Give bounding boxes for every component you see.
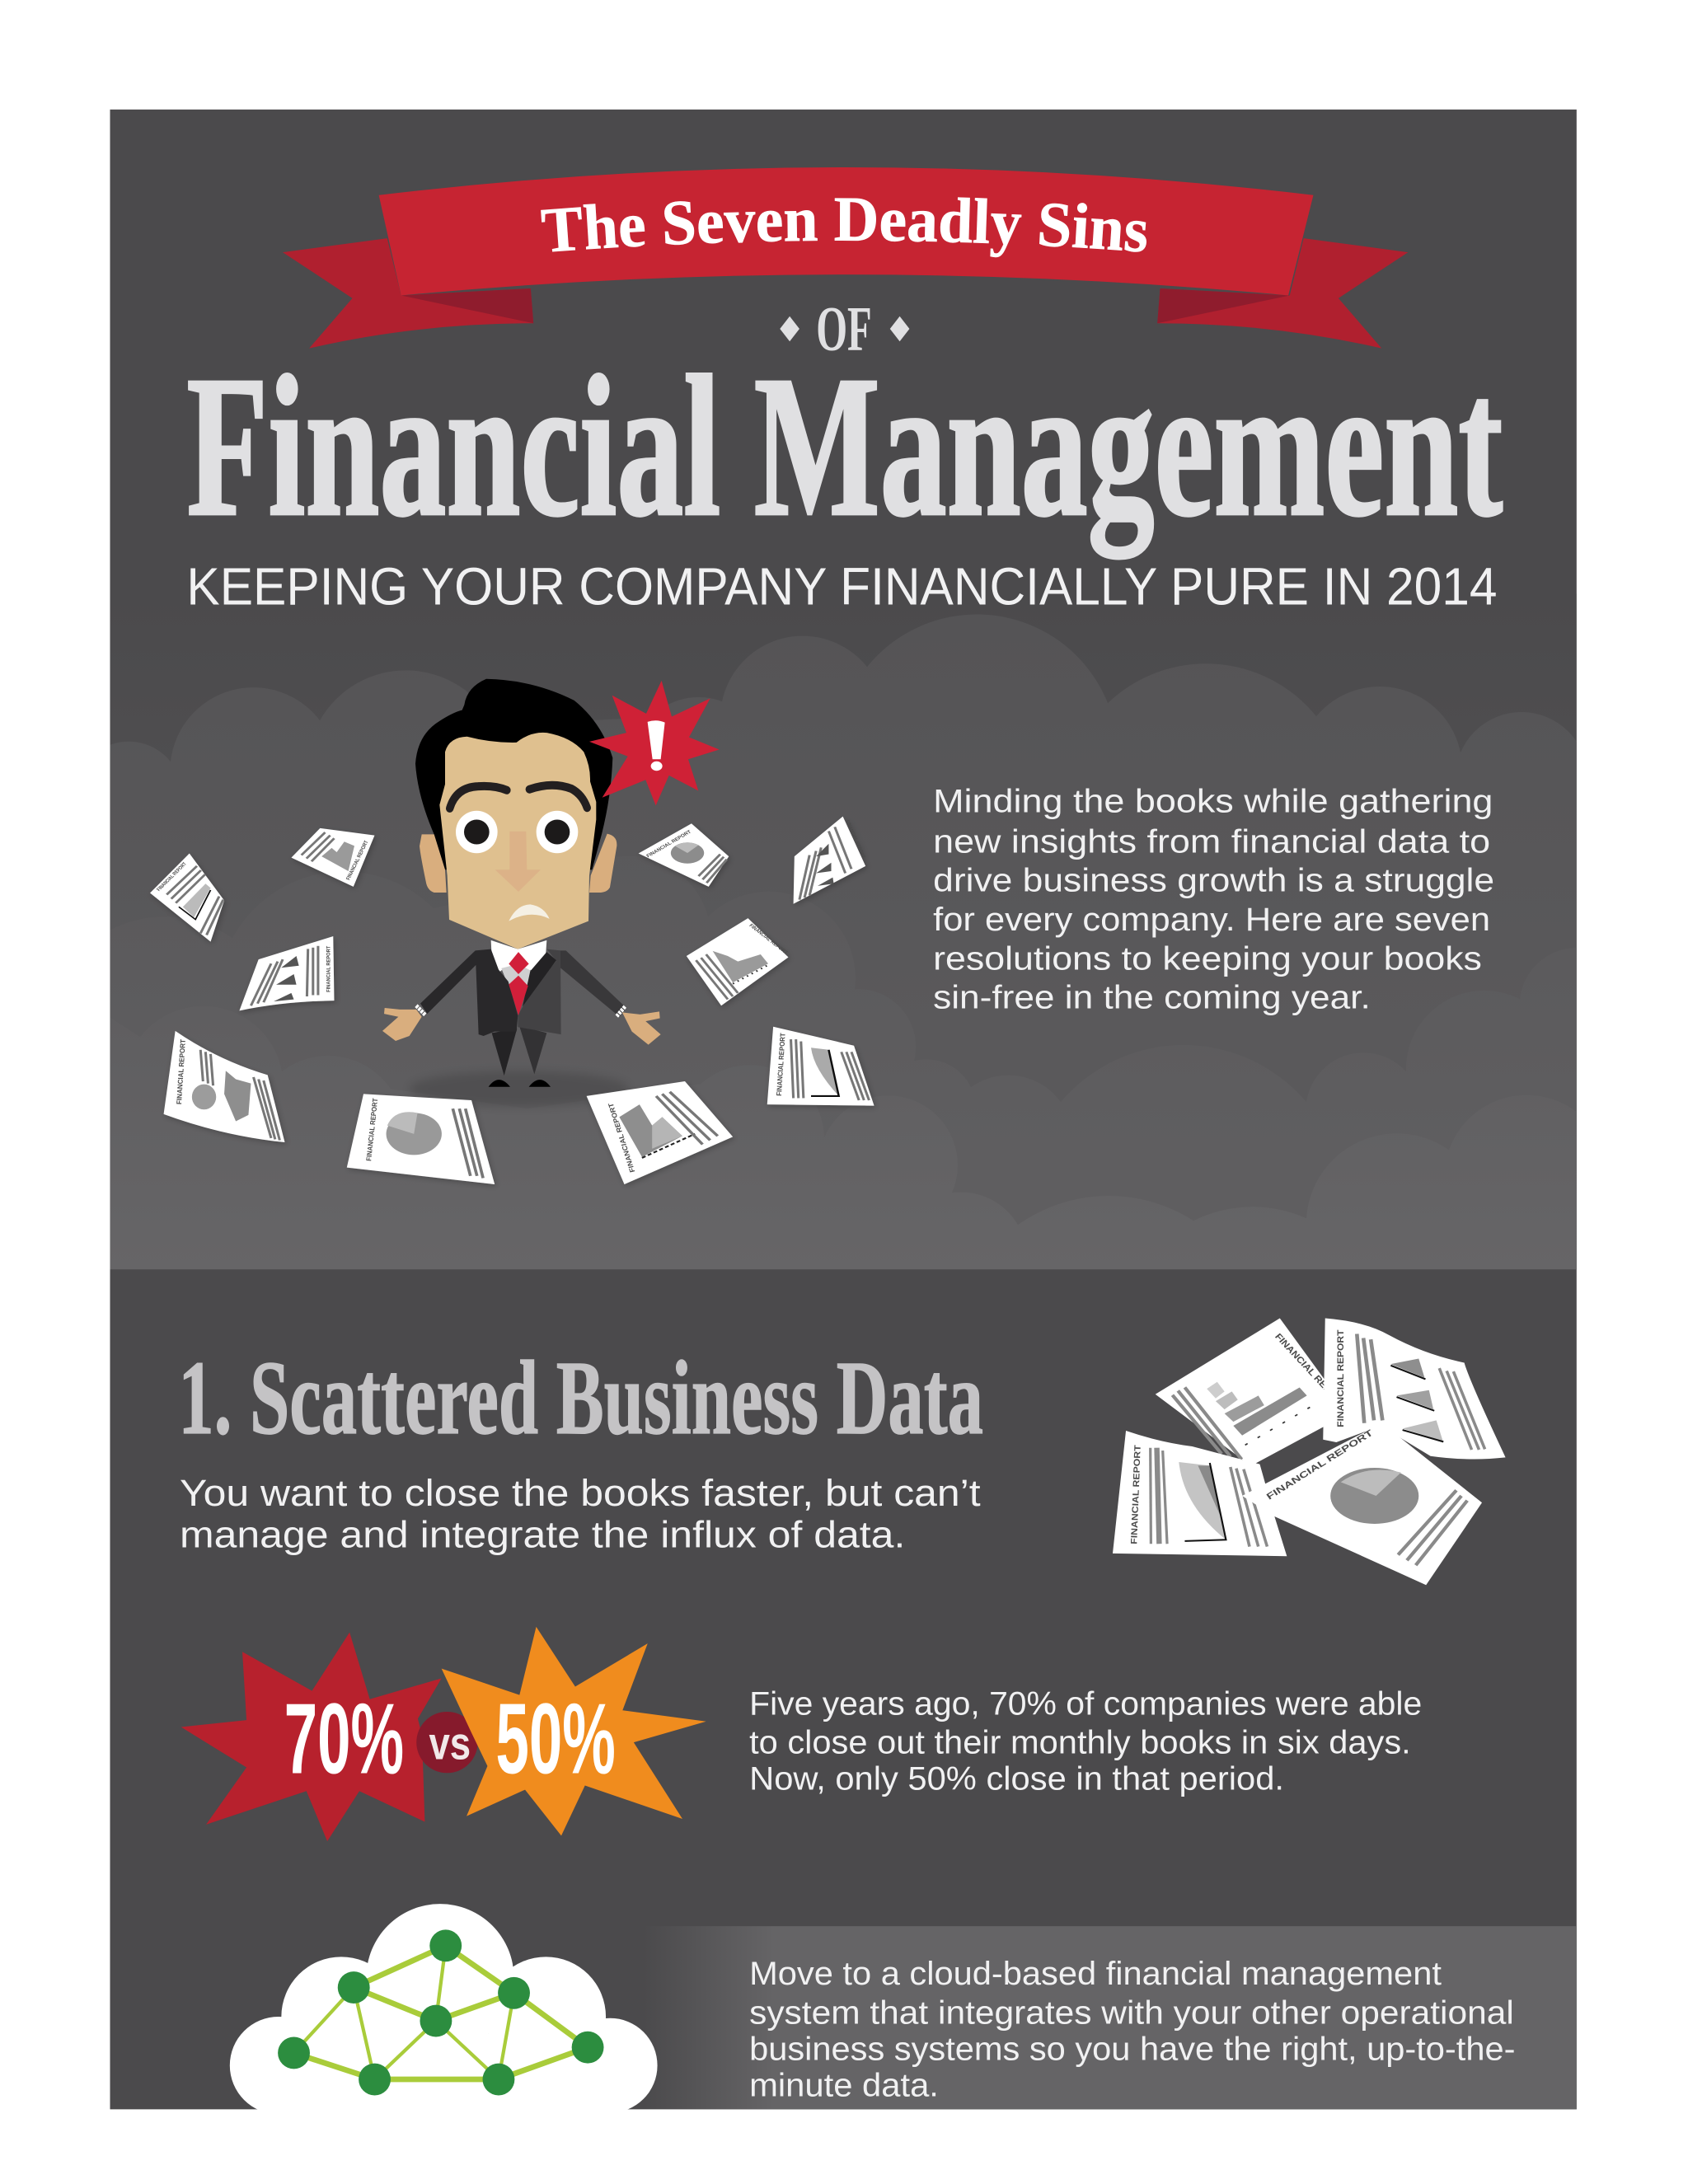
report: pie chart bbox=[1242, 1423, 1482, 1585]
stat: vs badge: vs bbox=[429, 1718, 471, 1769]
panel: solution band bbox=[644, 1926, 1577, 2109]
scattered report papers bbox=[150, 817, 874, 1184]
report paper: lower centre: FINANCIAL REPORT bbox=[365, 1098, 379, 1161]
tie bbox=[509, 952, 529, 1015]
eyes bbox=[456, 811, 578, 853]
report paper: top right bbox=[639, 823, 729, 887]
report: list charts bbox=[1323, 1319, 1506, 1459]
ground shadow bbox=[410, 1071, 629, 1107]
icon: stack of financial reports bbox=[1113, 1319, 1506, 1585]
panel: dark background bbox=[110, 110, 1577, 2109]
stat text: Now, only 50% close in that period. bbox=[749, 1761, 1284, 1797]
ribbon right tail bbox=[1157, 238, 1408, 349]
shoes bbox=[489, 1080, 551, 1087]
report: area chart bbox=[1113, 1431, 1287, 1556]
report paper: middle right: FINANCIAL REPORT bbox=[748, 923, 789, 956]
network lines bbox=[294, 1946, 588, 2079]
cloud layer back bbox=[110, 615, 1577, 903]
solution text: business systems so you have the right, up-to-the- bbox=[749, 2031, 1515, 2067]
stat: orange burst 50% bbox=[442, 1627, 706, 1835]
jacket right bbox=[518, 949, 561, 1034]
arms bbox=[420, 950, 626, 1017]
section heading: 1. Scattered Business Data bbox=[178, 1339, 983, 1456]
intro text: for every company. Here are seven bbox=[933, 902, 1490, 938]
section text: You want to close the books faster, but can’t bbox=[180, 1472, 981, 1514]
icon: red alarm burst bbox=[589, 681, 720, 805]
right hand bbox=[622, 1011, 661, 1045]
hero backdrop bbox=[1576, 593, 1577, 948]
report paper: top left bbox=[291, 828, 374, 887]
eyebrows bbox=[450, 785, 587, 808]
report paper: far left: FINANCIAL REPORT bbox=[156, 861, 188, 893]
hair bbox=[415, 679, 612, 869]
icon: exclamation mark bbox=[648, 720, 665, 771]
intro text bbox=[933, 783, 1494, 1016]
stat: orange burst 50%: 50% bbox=[496, 1682, 616, 1794]
solution text: system that integrates with your other operational bbox=[749, 1994, 1514, 2031]
legs bbox=[492, 1025, 546, 1076]
report: bar chart: FINANCIAL REPORT bbox=[1273, 1332, 1348, 1411]
report: pie chart: FINANCIAL REPORT bbox=[1265, 1428, 1376, 1502]
report: area chart: FINANCIAL REPORT bbox=[1130, 1444, 1143, 1544]
cloud shape bbox=[230, 1904, 658, 2117]
report paper: far right bbox=[794, 817, 865, 904]
intro text: drive business growth is a struggle bbox=[933, 863, 1494, 899]
report paper: lower right: FINANCIAL REPORT bbox=[775, 1033, 787, 1096]
left hand bbox=[382, 1008, 422, 1041]
report paper: lower right bbox=[767, 1027, 874, 1106]
cuffs bbox=[416, 1005, 625, 1016]
stat text: Five years ago, 70% of companies were able bbox=[749, 1685, 1422, 1722]
report paper: far right: FINANCIAL REPORT bbox=[844, 819, 865, 859]
solution text bbox=[749, 1956, 1515, 2103]
report paper: lower left: FINANCIAL REPORT bbox=[175, 1039, 187, 1104]
report paper: lower centre bbox=[347, 1094, 495, 1184]
subtitle: KEEPING YOUR COMPANY FINANCIALLY PURE IN 2014 bbox=[186, 557, 1498, 616]
report: bar chart bbox=[1156, 1319, 1348, 1465]
panel: hero clouds bbox=[107, 593, 1587, 1269]
icon: cloud network bbox=[230, 1904, 658, 2117]
heading: of: OF bbox=[816, 293, 872, 363]
intro text: resolutions to keeping your books bbox=[933, 940, 1482, 977]
stat: vs badge bbox=[416, 1712, 478, 1773]
report: list charts: FINANCIAL REPORT bbox=[1337, 1329, 1346, 1427]
left ear bbox=[420, 834, 447, 893]
solution text: Move to a cloud-based financial management bbox=[749, 1956, 1442, 1992]
ribbon left fold bbox=[401, 288, 533, 323]
section text: manage and integrate the influx of data. bbox=[180, 1514, 905, 1556]
cloud layer middle bbox=[107, 855, 1582, 1269]
right ear bbox=[589, 834, 617, 893]
report paper: lower left bbox=[164, 1031, 284, 1142]
stat text bbox=[749, 1685, 1422, 1797]
intro text: Minding the books while gathering bbox=[933, 783, 1493, 819]
illustration: stressed businessman bbox=[382, 679, 720, 1107]
shirt shadow bbox=[501, 963, 532, 986]
report paper: far left bbox=[150, 854, 224, 942]
solution text: minute data. bbox=[749, 2067, 939, 2103]
report paper: top left: FINANCIAL REPORT bbox=[345, 840, 370, 881]
ribbon title text: The Seven Deadly Sins bbox=[541, 197, 1146, 257]
jacket left bbox=[476, 949, 518, 1036]
mouth bbox=[509, 904, 550, 921]
report paper: lower centre right bbox=[587, 1081, 733, 1184]
section text bbox=[180, 1472, 981, 1556]
stat text: to close out their monthly books in six days. bbox=[749, 1725, 1411, 1761]
report paper: middle left bbox=[239, 936, 334, 1010]
ribbon right fold bbox=[1157, 288, 1290, 323]
nose bbox=[495, 832, 541, 892]
intro text: new insights from financial data to bbox=[933, 823, 1490, 860]
cloud layer front bbox=[107, 1006, 1582, 1269]
report paper: top right: FINANCIAL REPORT bbox=[645, 829, 692, 859]
banner: red ribbon bbox=[283, 167, 1408, 349]
ribbon left tail bbox=[283, 238, 533, 349]
heading: of bbox=[780, 293, 909, 363]
network nodes bbox=[278, 1929, 604, 2095]
report paper: middle left: FINANCIAL REPORT bbox=[326, 946, 332, 992]
stat: red burst 70%: 70% bbox=[284, 1682, 404, 1794]
report paper: middle right bbox=[687, 918, 789, 1005]
lapel bbox=[523, 952, 556, 1006]
shirt bbox=[491, 940, 546, 987]
stat: red burst 70% bbox=[181, 1633, 442, 1841]
report paper: lower centre right: FINANCIAL REPORT bbox=[607, 1102, 636, 1173]
intro text: sin-free in the coming year. bbox=[933, 980, 1371, 1016]
face bbox=[439, 733, 596, 949]
ribbon main band bbox=[379, 167, 1313, 295]
